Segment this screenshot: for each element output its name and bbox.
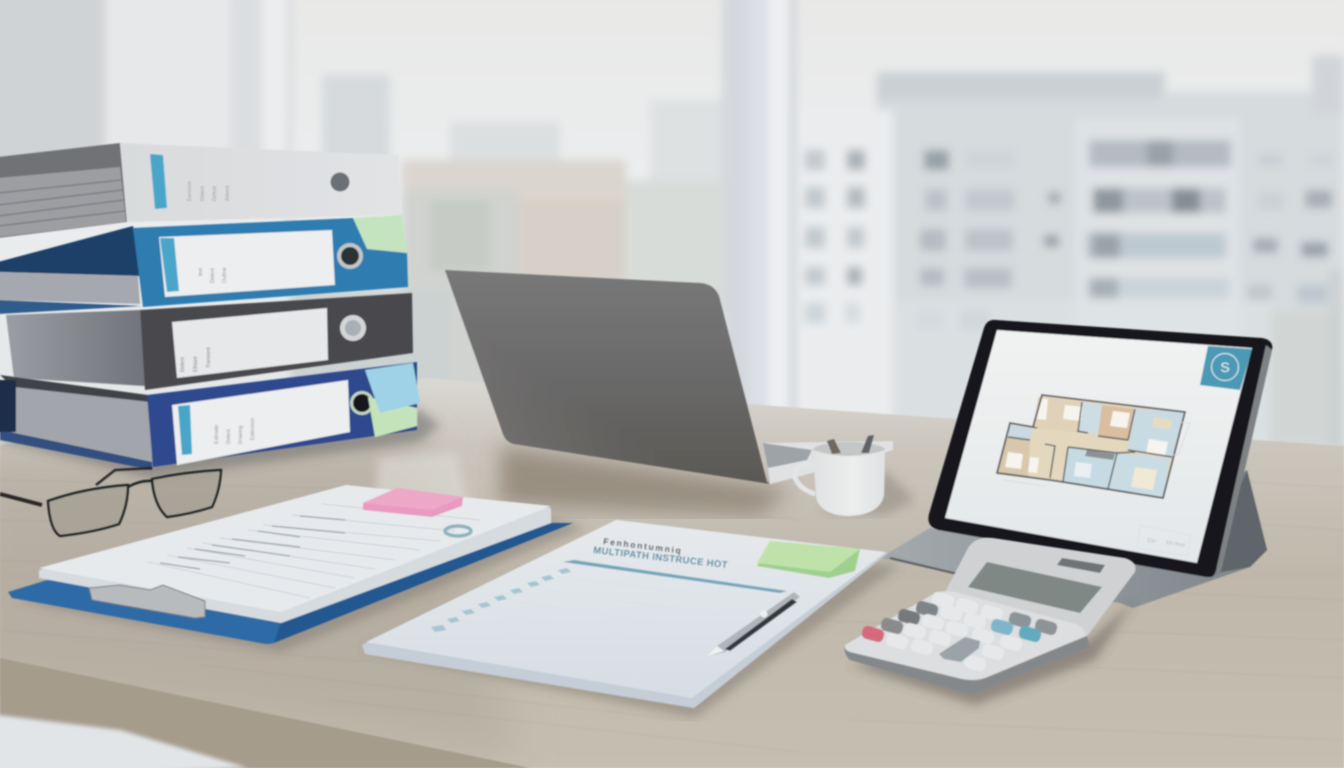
white block: [795, 110, 893, 430]
paper: [362, 520, 888, 708]
tablet stand: [880, 470, 1267, 608]
mug body: [813, 450, 885, 516]
sticky tab: green: [368, 397, 417, 437]
glasses: [0, 468, 221, 536]
balcony outline: [1003, 422, 1190, 486]
insurance document: [362, 520, 900, 718]
binder 3: charcoal: Transient: [206, 347, 212, 368]
pen: [706, 592, 800, 657]
binder 4: navy: [0, 362, 420, 470]
walls: [997, 395, 1185, 498]
left wall: [0, 0, 106, 180]
clipboard with checklist: [8, 485, 585, 652]
binder 2: blue: [0, 215, 408, 314]
desk front edge: [0, 658, 530, 768]
window column: [722, 0, 748, 415]
metal clip: [89, 585, 205, 618]
checklist rows: [148, 504, 480, 598]
binder 3: charcoal: Detent: [180, 357, 186, 372]
tablet body: [928, 320, 1272, 577]
checklist text: [160, 516, 345, 569]
green sticky: [757, 541, 860, 578]
app badge: S: [1220, 359, 1230, 375]
building windows: [805, 140, 1334, 330]
document heading: Fenhontumniq: [603, 536, 681, 555]
binder 3: charcoal: [6, 293, 413, 390]
binder shadow: [0, 410, 440, 478]
form lines: [480, 578, 750, 660]
rooms: [997, 395, 1185, 498]
binder stack: [0, 143, 440, 478]
binder 2: blue: text: [198, 267, 204, 276]
binder 4: navy: Estimate: [214, 424, 220, 444]
on-screen scale box: [1137, 525, 1190, 556]
binder 2: blue: Detent: [210, 268, 216, 283]
on-screen scale box: Eth Best: [1166, 540, 1186, 549]
calculator: [845, 538, 1136, 705]
sticky tab: blue: [365, 363, 420, 413]
pens: [827, 439, 841, 454]
teal header rule: [563, 560, 787, 593]
binder 4: navy: Extension: [250, 418, 256, 440]
darker left zone: [0, 440, 520, 760]
on-screen scale box: Ein: [1147, 538, 1156, 545]
distant buildings, left window: [322, 75, 390, 165]
insurance document: MULTIPATH INSTRUCE HOT: [593, 545, 728, 571]
mug rim and inside: [813, 442, 885, 458]
wood grain: [0, 480, 1344, 752]
app badge: [1200, 346, 1252, 390]
calculator top: [945, 538, 1136, 636]
binder 2: blue: Outline: [222, 267, 228, 283]
mug with pens: [795, 435, 915, 516]
pink building: [402, 160, 626, 290]
solar panel: [1057, 558, 1105, 573]
binder 3: charcoal: Ethiont: [193, 356, 199, 372]
foreground white strip: [0, 714, 248, 768]
binder 4: navy: Drawing: [238, 425, 244, 444]
laptop lid: [445, 270, 770, 484]
keypad: [861, 591, 1058, 672]
laptop shadow on desk: [500, 445, 790, 515]
tablet screen: [945, 330, 1252, 563]
binder 1: white: Eamcore: [187, 181, 193, 201]
calculator body side: [845, 636, 1090, 694]
clipboard board: [8, 522, 573, 644]
binder 1: white: Detent: [200, 186, 206, 201]
floor plan: [997, 395, 1190, 498]
wooden desk: [0, 378, 1344, 768]
window reflection: [375, 452, 470, 505]
binder 1: white: [0, 143, 402, 238]
binder 1: white: Advent: [225, 185, 231, 201]
checklist squares: [431, 568, 571, 632]
key plate: [845, 591, 1086, 680]
pink sticky: [363, 488, 463, 517]
laptop base: [765, 441, 893, 484]
furniture: [1005, 398, 1172, 490]
right buildings: [877, 72, 1165, 122]
paper stack: [39, 485, 551, 623]
window background with blurred city: [0, 0, 1344, 470]
mug handle: [795, 464, 815, 494]
binder 1: white: Defeat: [212, 186, 218, 201]
binder 4: navy: Detent: [226, 429, 232, 444]
tablet with floor plan: [880, 320, 1272, 608]
laptop: [445, 270, 893, 515]
calculator display: [968, 562, 1102, 613]
